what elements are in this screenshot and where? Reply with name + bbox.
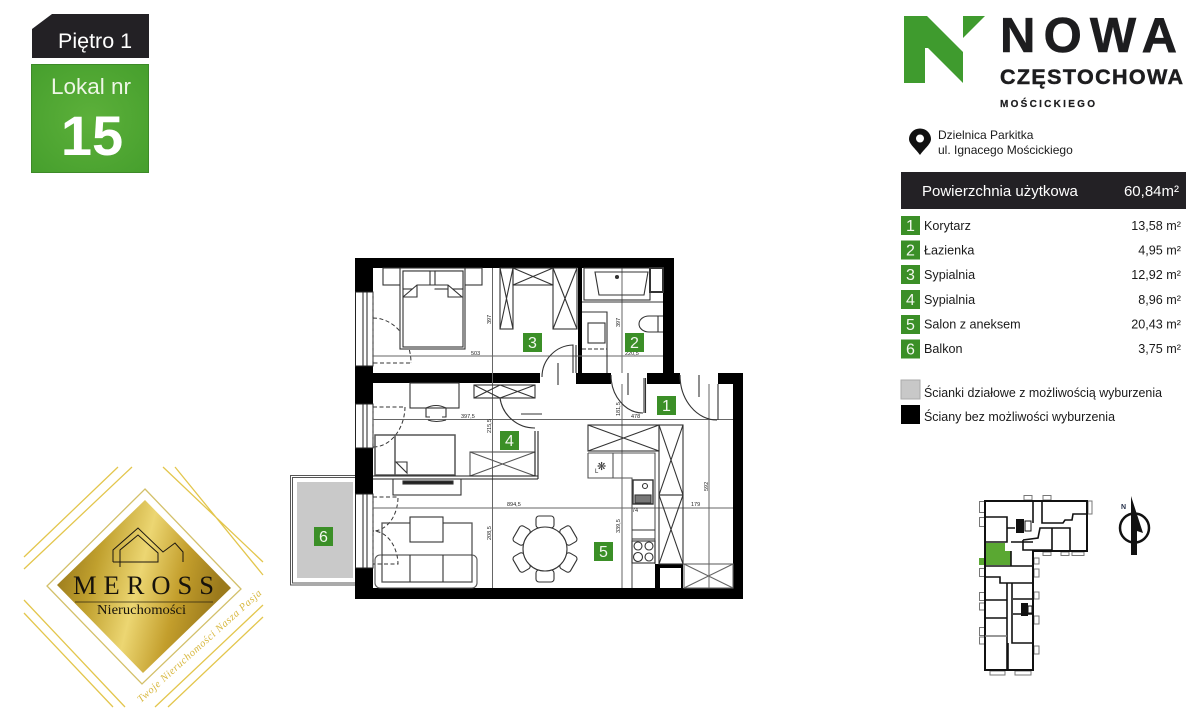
north arrow bbox=[1120, 496, 1149, 555]
dimension lines and labels: 208,5 bbox=[487, 526, 493, 540]
dimension lines and labels: 592 bbox=[704, 482, 710, 491]
row 3: Sypialnia: 3 bbox=[906, 267, 915, 284]
gold diamond bbox=[57, 500, 231, 673]
key plan of the building bbox=[979, 496, 1092, 675]
wall legend bbox=[901, 380, 1162, 424]
room number badges bbox=[314, 333, 676, 561]
furniture: bedroom 4 bbox=[373, 383, 538, 479]
Meross agency logo: Twoje Nieruchomości Nasza Pasja bbox=[136, 588, 264, 705]
icon: location pin bbox=[909, 128, 931, 155]
developer logo: Nowa Częstochowa: MOŚCICKIEGO bbox=[1000, 97, 1095, 110]
row 4: Sypialnia: 8,96 m² bbox=[1138, 293, 1181, 307]
interior doors bbox=[500, 345, 718, 428]
Meross agency logo bbox=[24, 467, 264, 707]
row 1: Korytarz bbox=[901, 216, 1181, 235]
developer logo: Nowa Częstochowa: CZĘSTOCHOWA bbox=[1000, 65, 1183, 89]
dimension lines and labels: 181,5 bbox=[616, 402, 622, 416]
unit number panel bbox=[32, 64, 148, 172]
badge 4: 4 bbox=[505, 433, 514, 450]
row 6: Balkon bbox=[901, 340, 1181, 358]
badge 1 bbox=[657, 396, 676, 415]
row 4: Sypialnia: 4 bbox=[906, 292, 915, 309]
row 5: Salon z aneksem: 20,43 m² bbox=[1131, 318, 1181, 332]
address with location pin bbox=[909, 128, 1073, 157]
badge 2 bbox=[625, 333, 644, 352]
row 2: Łazienka: 4,95 m² bbox=[1138, 244, 1181, 258]
floor label: Piętro 1: Piętro 1 bbox=[58, 29, 132, 53]
developer logo: Nowa Częstochowa: NOWA bbox=[1000, 9, 1177, 63]
row 4: Sypialnia: Sypialnia bbox=[924, 293, 975, 307]
badge 3: 3 bbox=[528, 335, 537, 352]
kitchen: L bbox=[595, 469, 599, 475]
highlighted unit bbox=[979, 543, 1011, 565]
dimension lines and labels: 397 bbox=[616, 318, 622, 327]
furniture: dining table with six chairs bbox=[512, 516, 578, 582]
floor plan bbox=[290, 258, 743, 599]
badge 6: 6 bbox=[319, 529, 328, 546]
dimension lines and labels: 179 bbox=[691, 502, 700, 508]
floor label: Piętro 1 bbox=[32, 14, 149, 58]
badge 5 bbox=[594, 542, 613, 561]
windows and door swings bbox=[356, 292, 411, 568]
furniture: living room bbox=[375, 479, 477, 588]
building outline bbox=[985, 501, 1087, 670]
legend: fixed walls bbox=[901, 405, 1115, 424]
badge 4 bbox=[500, 431, 519, 450]
usable area header bar: Powierzchnia użytkowa bbox=[922, 183, 1079, 200]
row 2: Łazienka: 2 bbox=[906, 242, 915, 260]
legend: removable partitions bbox=[901, 380, 1162, 400]
room area table bbox=[901, 216, 1181, 358]
unit number panel: Lokal nr bbox=[51, 74, 132, 99]
badge 3 bbox=[523, 333, 542, 352]
kitchen bbox=[588, 425, 733, 588]
Meross agency logo: Nieruchomości bbox=[97, 603, 186, 618]
badge 5: 5 bbox=[599, 544, 608, 561]
row 6: Balkon: 3,75 m² bbox=[1138, 342, 1181, 356]
row 5: Salon z aneksem: 5 bbox=[906, 317, 915, 334]
dimension lines and labels: 397,5 bbox=[461, 414, 475, 420]
row 3: Sypialnia bbox=[901, 265, 1181, 284]
row 6: Balkon: 6 bbox=[906, 342, 915, 358]
usable area header bar: 60,84m² bbox=[1124, 183, 1179, 200]
unit number panel: 15 bbox=[61, 104, 123, 167]
dimension lines and labels: 339,5 bbox=[616, 519, 622, 533]
dimension lines and labels: 894,5 bbox=[507, 502, 521, 508]
usable area header bar bbox=[901, 172, 1186, 209]
row 2: Łazienka bbox=[901, 240, 1181, 260]
dimension lines and labels: 397 bbox=[487, 315, 493, 324]
panel: balcony bbox=[290, 476, 356, 585]
badge 1: 1 bbox=[662, 398, 671, 415]
dimension lines and labels: 215,5 bbox=[487, 419, 493, 433]
badge 2: 2 bbox=[630, 335, 639, 352]
gold border lines bbox=[24, 467, 263, 707]
row 1: Korytarz: Korytarz bbox=[924, 219, 971, 233]
stair cores bbox=[1016, 519, 1032, 616]
dimension lines and labels: 478 bbox=[631, 414, 640, 420]
badge 6 bbox=[314, 527, 333, 546]
row 3: Sypialnia: 12,92 m² bbox=[1131, 268, 1181, 282]
address with location pin: Dzielnica Parkitka bbox=[938, 128, 1034, 142]
dimension lines and labels bbox=[373, 268, 733, 588]
furniture: bedroom 3 bbox=[383, 268, 577, 349]
balconies bbox=[980, 496, 1092, 675]
row 3: Sypialnia: Sypialnia bbox=[924, 268, 975, 282]
address with location pin: ul. Ignacego Mościckiego bbox=[938, 143, 1073, 157]
row 5: Salon z aneksem: Salon z aneksem bbox=[924, 318, 1021, 332]
furniture: bathroom bbox=[582, 268, 663, 373]
row 1: Korytarz: 13,58 m² bbox=[1131, 219, 1181, 233]
row 2: Łazienka: Łazienka bbox=[924, 244, 974, 258]
dimension lines and labels: 74 bbox=[632, 508, 638, 514]
legend: removable partitions: Ścianki działowe z możliwością wyburzenia bbox=[924, 385, 1162, 400]
north arrow: N bbox=[1121, 504, 1126, 511]
row 6: Balkon: Balkon bbox=[924, 342, 963, 356]
dimension lines and labels: 220,5 bbox=[625, 351, 639, 357]
Meross agency logo: MEROSS bbox=[73, 570, 214, 600]
legend: fixed walls: Ściany bez możliwości wyburzenia bbox=[924, 409, 1115, 424]
row 1: Korytarz: 1 bbox=[906, 218, 915, 235]
row 4: Sypialnia bbox=[901, 290, 1181, 309]
row 5: Salon z aneksem bbox=[901, 315, 1181, 334]
dimension lines and labels: 503 bbox=[471, 351, 480, 357]
kitchen: ❋ bbox=[597, 461, 606, 473]
developer logo: Nowa Częstochowa bbox=[904, 9, 1183, 110]
icon: green N mark bbox=[904, 16, 985, 83]
icon: house outline bbox=[113, 528, 183, 567]
walls bbox=[355, 258, 743, 599]
